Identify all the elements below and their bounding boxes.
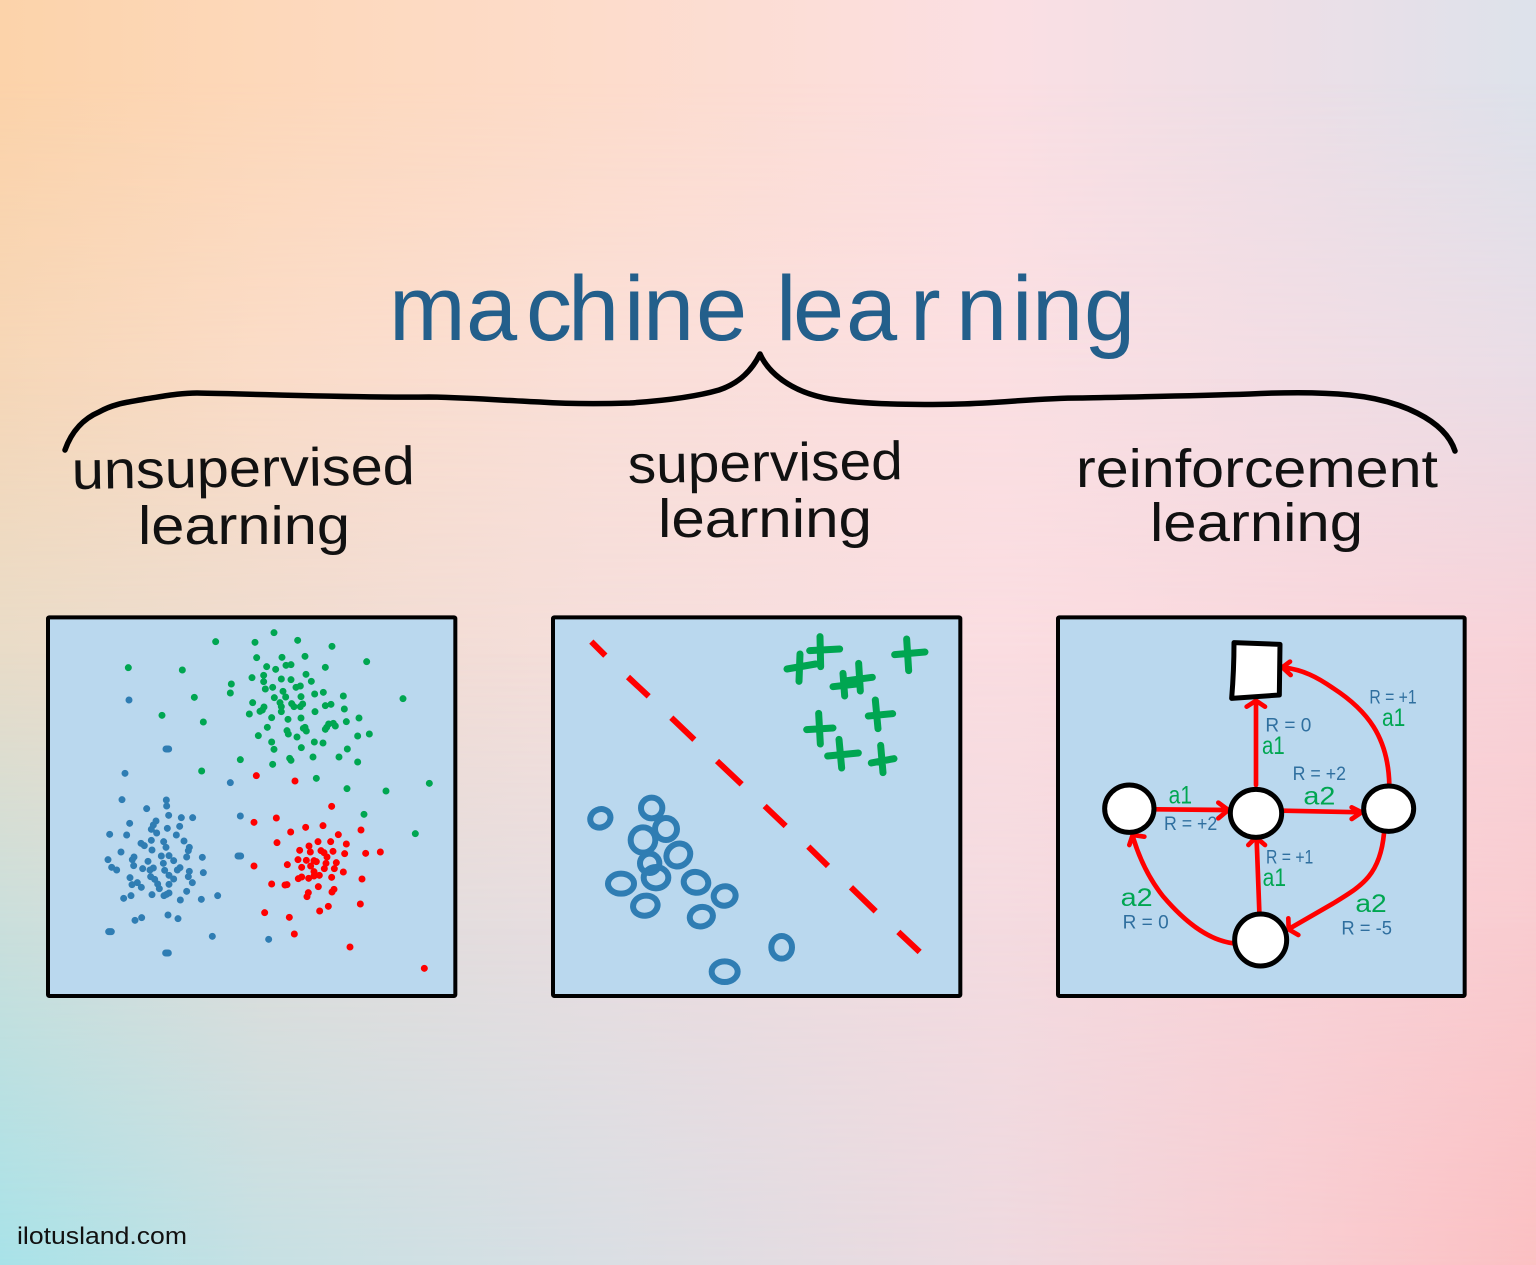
- source credit: ilotusland.com: [17, 1223, 187, 1250]
- scatter: green cluster: [128, 633, 429, 834]
- heading: supervised learning: [627, 431, 903, 549]
- blue reward labels: R = -5: [1341, 919, 1392, 940]
- heading: supervised learning: learning: [658, 489, 872, 549]
- state nodes: [1105, 785, 1414, 966]
- heading: reinforcement learning: [1076, 439, 1438, 553]
- blue reward labels: R = 0: [1123, 912, 1169, 933]
- blue reward labels: R = +1: [1266, 847, 1313, 868]
- scatter: blue cluster: [108, 700, 269, 953]
- green action labels: a2: [1355, 891, 1387, 918]
- heading: unsupervised learning: learning: [138, 496, 350, 556]
- green action labels: a1: [1382, 705, 1405, 732]
- curly brace: [65, 354, 1455, 451]
- green action labels: a2: [1121, 885, 1153, 912]
- blue reward labels: R = +2: [1164, 814, 1217, 835]
- scatter: red cluster: [254, 776, 424, 968]
- blue reward labels: R = +1: [1369, 687, 1417, 708]
- blue reward labels: R = +2: [1293, 764, 1346, 785]
- terminal state square: [1232, 643, 1280, 698]
- green action labels: a2: [1303, 784, 1335, 811]
- panel: reinforcement learning state graph: [1058, 617, 1465, 996]
- heading: unsupervised learning: unsupervised: [71, 436, 415, 501]
- green action labels: a1: [1169, 782, 1192, 809]
- blue circle markers: [587, 798, 792, 982]
- green action labels: a1: [1262, 733, 1285, 760]
- decision boundary dashed line: [591, 642, 920, 952]
- blue reward labels: R = 0: [1265, 715, 1311, 736]
- heading: reinforcement learning: reinforcement: [1076, 439, 1438, 499]
- green action labels: a1: [1263, 865, 1286, 892]
- heading: supervised learning: supervised: [627, 431, 903, 495]
- blue reward labels: [1123, 687, 1417, 940]
- arrows between states: [1129, 662, 1389, 943]
- panel: unsupervised clusters: [48, 617, 455, 996]
- heading: reinforcement learning: learning: [1150, 493, 1363, 553]
- panel: supervised classification: [553, 617, 960, 996]
- title: machine learning: [389, 258, 1135, 360]
- green plus markers: [787, 637, 925, 773]
- green action labels: [1121, 705, 1405, 918]
- heading: unsupervised learning: [71, 436, 415, 556]
